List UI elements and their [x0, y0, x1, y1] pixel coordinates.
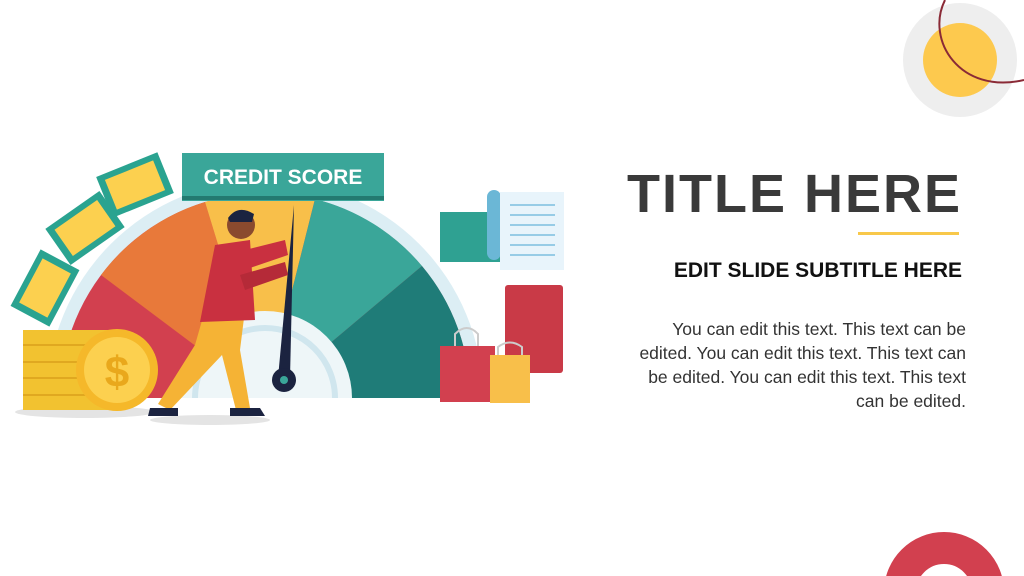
- body text: [639, 319, 966, 411]
- needle: [272, 205, 296, 392]
- money bills: [11, 152, 174, 327]
- banner: credit score: [182, 153, 384, 201]
- body text: be edited. You can edit this text. This text: [648, 367, 966, 387]
- coins: [15, 329, 158, 418]
- coins: $: [105, 348, 129, 397]
- body text: can be edited.: [856, 391, 966, 411]
- banner: credit score: CREDIT SCORE: [204, 166, 362, 189]
- receipts and cards: [440, 190, 564, 373]
- body text: You can edit this text. This text can be: [672, 319, 966, 339]
- illustration: credit score gauge: [10, 152, 564, 425]
- man pushing needle: [148, 210, 288, 425]
- title underline: [858, 232, 959, 235]
- body text: edited. You can edit this text. This text can: [639, 343, 966, 363]
- title: TITLE HERE: [627, 164, 962, 224]
- decoration: top-right circles: [903, 0, 1024, 117]
- shopping bags: [440, 328, 530, 403]
- subtitle: EDIT SLIDE SUBTITLE HERE: [674, 259, 962, 282]
- gauge: [47, 180, 483, 398]
- decoration: bottom-right ring: [886, 532, 1002, 576]
